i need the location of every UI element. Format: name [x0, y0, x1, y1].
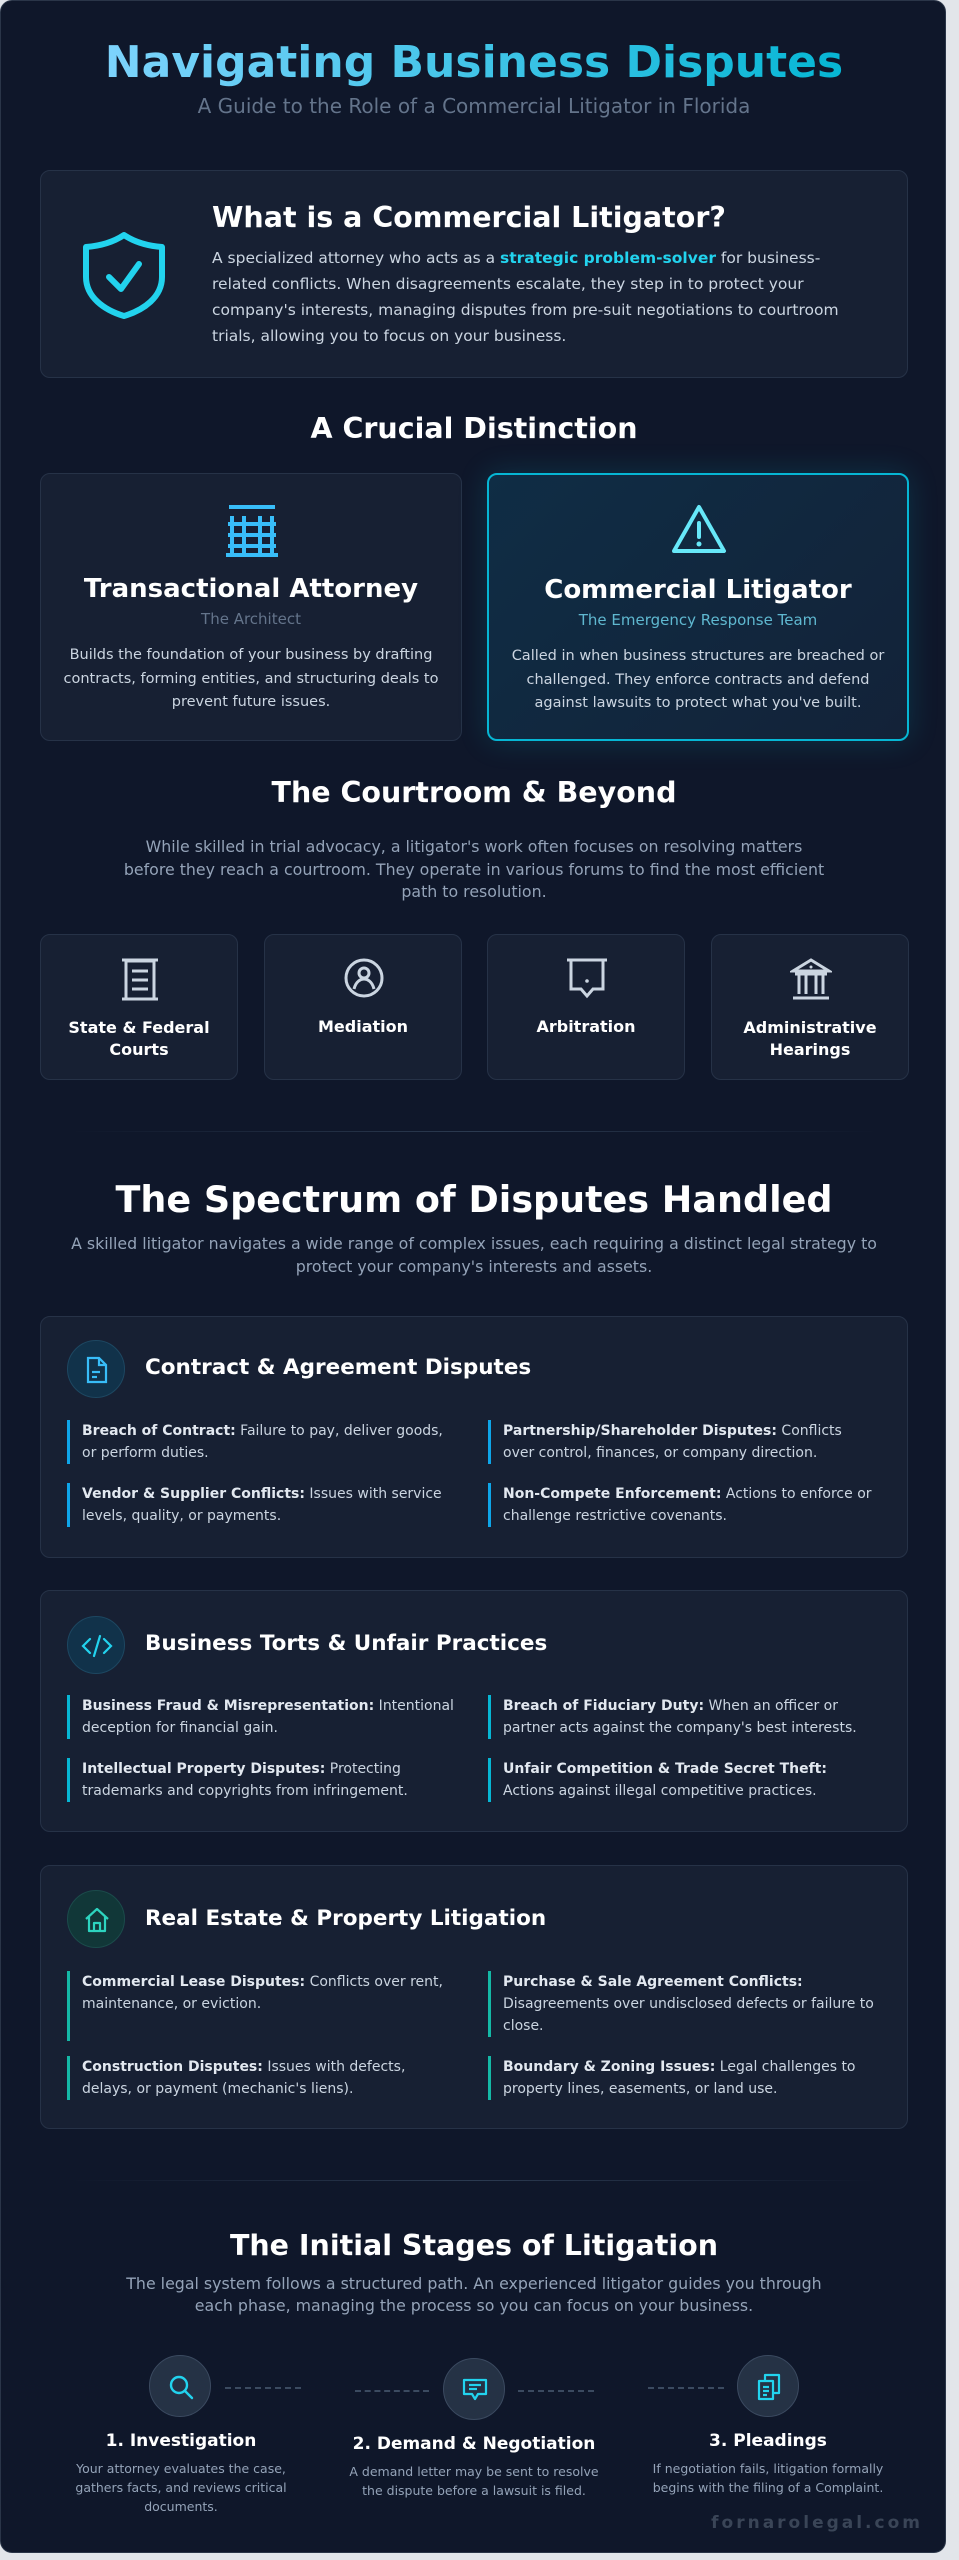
- card text: Called in when business structures are breached or: [512, 648, 884, 664]
- panel title: Contract & Agreement Disputes: [145, 1355, 531, 1380]
- heading: the initial stages of litigation: The Initial Stages of Litigation: [230, 2229, 718, 2262]
- item: [488, 1971, 874, 2037]
- step text: Your attorney evaluates the case,: [76, 2461, 286, 2476]
- panel title: Business Torts & Unfair Practices: [145, 1631, 547, 1656]
- icon: search: [149, 2355, 211, 2417]
- card text: [512, 648, 884, 711]
- item: Actions against illegal competitive practices.: [503, 1783, 817, 1799]
- item: close.: [503, 2018, 544, 2034]
- text block: spectrum intro: [71, 1234, 877, 1276]
- item: Breach of Fiduciary Duty: When an officer or: [503, 1698, 838, 1714]
- step text: If negotiation fails, litigation formally: [653, 2461, 883, 2476]
- panel: business torts & unfair practices: [40, 1590, 908, 1832]
- label: Administrative: [743, 1018, 877, 1037]
- text block: company's interests, managing disputes from pre-suit negotiations to courtroom: [212, 301, 839, 319]
- step text: the dispute before a lawsuit is filed.: [362, 2483, 586, 2498]
- item: [67, 1483, 442, 1527]
- step 2: demand & negotiation: [349, 2358, 599, 2498]
- card text: Builds the foundation of your business by drafting: [70, 647, 432, 663]
- item: [67, 1971, 443, 2041]
- step 1: investigation: [75, 2355, 287, 2514]
- card text: prevent future issues.: [172, 694, 330, 710]
- step text: documents.: [144, 2499, 218, 2514]
- icon: building: [226, 505, 278, 557]
- icon: chat: [443, 2358, 505, 2420]
- panel: commercial litigator: [487, 473, 909, 741]
- panel: state & federal courts: [40, 934, 238, 1080]
- item: challenge restrictive covenants.: [503, 1508, 727, 1524]
- card text: challenged. They enforce contracts and defend: [526, 672, 869, 688]
- item: delays, or payment (mechanic's liens).: [82, 2081, 353, 2097]
- panel: administrative hearings: [711, 934, 909, 1080]
- item: Construction Disputes: Issues with defects,: [82, 2059, 405, 2075]
- step title: 2. Demand & Negotiation: [353, 2434, 595, 2454]
- item: over control, finances, or company direction.: [503, 1445, 817, 1461]
- subtitle: A Guide to the Role of a Commercial Litigator in Florida: [198, 94, 750, 118]
- item: [67, 1695, 454, 1739]
- panel: arbitration: [487, 934, 685, 1080]
- step text: [75, 2461, 287, 2514]
- heading: What is a Commercial Litigator?: [212, 201, 726, 234]
- text block: [212, 249, 839, 345]
- text block: stages intro: The legal system follows a structured path. An experienced litigator guides you through: [126, 2274, 822, 2293]
- label: Hearings: [770, 1040, 850, 1059]
- icon: person circle: [344, 958, 384, 998]
- label: [68, 1018, 210, 1059]
- step text: [653, 2461, 883, 2495]
- item: Business Fraud & Misrepresentation: Intentional: [82, 1698, 454, 1714]
- item: Partnership/Shareholder Disputes: Conflicts: [503, 1423, 842, 1439]
- step text: A demand letter may be sent to resolve: [349, 2464, 599, 2479]
- label: Mediation: [318, 1017, 408, 1036]
- item: Intellectual Property Disputes: Protecting: [82, 1761, 401, 1777]
- item: levels, quality, or payments.: [82, 1508, 281, 1524]
- icon: institution: [790, 958, 832, 1000]
- item: Purchase & Sale Agreement Conflicts:: [503, 1974, 803, 1990]
- item: Disagreements over undisclosed defects or failure to: [503, 1996, 874, 2012]
- panel: mediation: [264, 934, 462, 1080]
- text block: stages intro: each phase, managing the process so you can focus on your business.: [195, 2296, 753, 2315]
- step title: 1. Investigation: [106, 2431, 256, 2451]
- icon: house: [67, 1890, 125, 1948]
- item: [488, 1758, 827, 1802]
- footer: website: fornarolegal.com: [711, 2513, 923, 2533]
- item: Vendor & Supplier Conflicts: Issues with service: [82, 1486, 442, 1502]
- item: trademarks and copyrights from infringement.: [82, 1783, 408, 1799]
- item: or perform duties.: [82, 1445, 209, 1461]
- text block: A specialized attorney who acts as a strategic problem-solver for business-: [212, 249, 820, 267]
- step text: [349, 2464, 599, 2498]
- card text: contracts, forming entities, and structuring deals to: [64, 670, 438, 686]
- text block: courtroom intro: path to resolution.: [401, 882, 547, 901]
- text block: courtroom intro: While skilled in trial advocacy, a litigator's work often focuses on resolving matters: [146, 837, 802, 856]
- label: State & Federal: [68, 1018, 210, 1037]
- card text: against lawsuits to protect what you've built.: [535, 695, 861, 711]
- label: Arbitration: [536, 1017, 636, 1036]
- text block: courtroom intro: [124, 837, 824, 901]
- heading: the spectrum of disputes handled: The Spectrum of Disputes Handled: [116, 1178, 832, 1221]
- item: Commercial Lease Disputes: Conflicts over rent,: [82, 1974, 443, 1990]
- arrow: connector 1: [225, 2387, 301, 2389]
- item: [488, 2056, 856, 2100]
- item: Breach of Contract: Failure to pay, deliver goods,: [82, 1423, 443, 1439]
- icon: banner: [567, 958, 607, 998]
- item: Boundary & Zoning Issues: Legal challenges to: [503, 2059, 856, 2075]
- icon: shield check: [83, 232, 165, 319]
- step 3: pleadings: [653, 2355, 883, 2495]
- text block: trials, allowing you to focus on your business.: [212, 327, 566, 345]
- card title: Commercial Litigator: [544, 575, 852, 605]
- icon: warning triangle: [672, 504, 726, 553]
- heading: a crucial distinction: A Crucial Distinction: [310, 412, 638, 445]
- text block: spectrum intro: protect your company's interests and assets.: [296, 1256, 652, 1276]
- title: Navigating Business Disputes: [105, 37, 843, 88]
- item: [67, 1420, 443, 1464]
- panel: what is a commercial litigator: [40, 170, 908, 378]
- text block: stages intro: [126, 2274, 822, 2315]
- icon: document: [122, 958, 158, 1000]
- item: deception for financial gain.: [82, 1720, 278, 1736]
- text block: related conflicts. When disagreements escalate, they step in to protect your: [212, 275, 804, 293]
- panel: real estate & property litigation: [40, 1865, 908, 2129]
- card subtitle: The Emergency Response Team: [579, 611, 817, 629]
- arrow: connector 3: [518, 2390, 594, 2392]
- label: Courts: [109, 1040, 169, 1059]
- label: [743, 1018, 877, 1059]
- item: maintenance, or eviction.: [82, 1996, 261, 2012]
- step title: 3. Pleadings: [709, 2431, 827, 2451]
- panel: contract & agreement disputes: [40, 1316, 908, 1558]
- icon: clipboard: [737, 2355, 799, 2417]
- item: Non-Compete Enforcement: Actions to enforce or: [503, 1486, 872, 1502]
- panel title: Real Estate & Property Litigation: [145, 1906, 546, 1931]
- heading: the courtroom & beyond: The Courtroom & Beyond: [272, 776, 676, 809]
- item: [67, 2056, 405, 2100]
- panel: transactional attorney: [40, 473, 462, 741]
- card title: Transactional Attorney: [84, 574, 418, 604]
- arrow: connector 2: [355, 2390, 429, 2392]
- icon: code: [67, 1616, 125, 1674]
- card subtitle: The Architect: [201, 610, 301, 628]
- step text: begins with the filing of a Complaint.: [653, 2480, 883, 2495]
- item: [488, 1483, 872, 1527]
- step text: gathers facts, and reviews critical: [75, 2480, 287, 2495]
- icon: file: [67, 1340, 125, 1398]
- arrow: connector 4: [648, 2387, 724, 2389]
- item: property lines, easements, or land use.: [503, 2081, 777, 2097]
- item: [67, 1758, 408, 1802]
- item: partner acts against the company's best interests.: [503, 1720, 857, 1736]
- card text: [64, 647, 438, 710]
- text block: courtroom intro: before they reach a courtroom. They operate in various forums to find the most efficient: [124, 860, 824, 878]
- item: [488, 1420, 842, 1464]
- item: [488, 1695, 857, 1739]
- item: Unfair Competition & Trade Secret Theft:: [503, 1761, 827, 1777]
- text block: spectrum intro: A skilled litigator navigates a wide range of complex issues, each requiring a distinct legal strategy to: [71, 1234, 877, 1253]
